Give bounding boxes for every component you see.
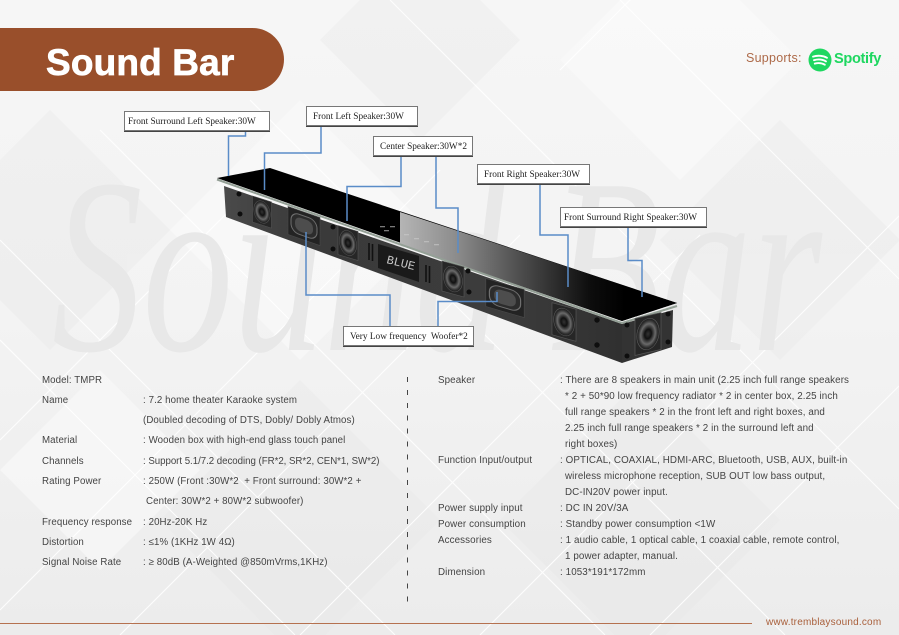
right specification list: 1 power adapter, manual. xyxy=(565,551,678,562)
right specification list: Speaker xyxy=(438,375,475,386)
front left speakers xyxy=(252,196,272,228)
front face xyxy=(224,186,622,363)
left specification list: Channels xyxy=(42,456,84,467)
left specification list: : ≥ 80dB (A-Weighted @850mVrms,1KHz) xyxy=(143,557,328,568)
top glass panel xyxy=(217,168,677,323)
icon: spotify logo xyxy=(808,48,832,72)
left specification list: Center: 30W*2 + 80W*2 subwoofer) xyxy=(146,496,303,507)
callout: front right xyxy=(477,164,590,184)
display with vents: BLUE xyxy=(385,253,416,274)
left specification list: : ≤1% (1KHz 1W 4Ω) xyxy=(143,537,235,548)
right specification list: Accessories xyxy=(438,535,492,546)
left specification list: Distortion xyxy=(42,537,84,548)
left specification list: : 7.2 home theater Karaoke system xyxy=(143,395,297,406)
callout: center: Center Speaker:30W*2 xyxy=(380,142,467,152)
right speakers xyxy=(442,261,464,297)
right specification list: Function Input/output xyxy=(438,455,532,466)
supports spotify xyxy=(746,48,882,72)
callout: front surround right: Front Surround Right Speaker:30W xyxy=(564,213,697,223)
footer rule xyxy=(0,623,752,624)
left specification list: Frequency response xyxy=(42,517,132,528)
right specification list: : OPTICAL, COAXIAL, HDMI-ARC, Bluetooth, USB, AUX, built-in xyxy=(560,455,847,466)
callout: woofer xyxy=(343,326,474,346)
left specification list: : 20Hz-20K Hz xyxy=(143,517,207,528)
right specification list: : 1053*191*172mm xyxy=(560,567,645,578)
right specification list: * 2 + 50*90 low frequency radiator * 2 in center box, 2.25 inch xyxy=(565,391,838,402)
left specification list: : 250W (Front :30W*2 + Front surround: 30W*2 + xyxy=(143,476,361,487)
right specification list: full range speakers * 2 in the front left and right boxes, and xyxy=(565,407,825,418)
left specification list: Material xyxy=(42,435,77,446)
left specification list: : Wooden box with high-end glass touch panel xyxy=(143,435,345,446)
callout: front left xyxy=(306,106,418,126)
callout: front right: Front Right Speaker:30W xyxy=(484,170,580,180)
left specification list: Name xyxy=(42,395,68,406)
callout: front left: Front Left Speaker:30W xyxy=(313,112,404,122)
left specification list: Rating Power xyxy=(42,476,101,487)
right specification list: : There are 8 speakers in main unit (2.25 inch full range speakers xyxy=(560,375,849,386)
footer website: www.tremblaysound.com xyxy=(766,617,881,628)
left specification list: : Support 5.1/7.2 decoding (FR*2, SR*2, CEN*1, SW*2) xyxy=(143,456,379,467)
display with vents xyxy=(369,243,430,283)
callout: front surround left: Front Surround Left Speaker:30W xyxy=(128,117,256,127)
screw holes xyxy=(236,192,670,358)
supports spotify: Supports: xyxy=(746,51,802,65)
right specification list: right boxes) xyxy=(565,439,617,450)
left specification list xyxy=(42,375,379,568)
right specification list: : 1 audio cable, 1 optical cable, 1 coaxial cable, remote control, xyxy=(560,535,839,546)
end face xyxy=(622,310,673,363)
callout: center xyxy=(373,136,473,156)
right specification list: Power consumption xyxy=(438,519,526,530)
supports spotify: Spotify xyxy=(834,51,881,67)
right specification list: : DC IN 20V/3A xyxy=(560,503,628,514)
callout: woofer: Very Low frequency Woofer*2 xyxy=(350,332,468,342)
callout: front surround right xyxy=(560,207,707,227)
right specification list: wireless microphone reception, SUB OUT low bass output, xyxy=(565,471,825,482)
left specification list: (Doubled decoding of DTS, Dobly/ Dobly Atmos) xyxy=(143,415,355,426)
leader lines xyxy=(228,125,642,326)
touch buttons xyxy=(380,226,439,245)
left specification list: Signal Noise Rate xyxy=(42,557,121,568)
column divider xyxy=(407,377,408,603)
right specification list: DC-IN20V power input. xyxy=(565,487,668,498)
title banner xyxy=(0,28,284,91)
title banner: Sound Bar xyxy=(46,42,234,83)
right specification list: : Standby power consumption <1W xyxy=(560,519,715,530)
right specification list: Power supply input xyxy=(438,503,523,514)
right specification list xyxy=(438,375,849,578)
left specification list: Model: TMPR xyxy=(42,375,102,386)
right specification list: 2.25 inch full range speakers * 2 in the surround left and xyxy=(565,423,814,434)
right specification list: Dimension xyxy=(438,567,485,578)
callout: front surround left xyxy=(124,111,270,131)
